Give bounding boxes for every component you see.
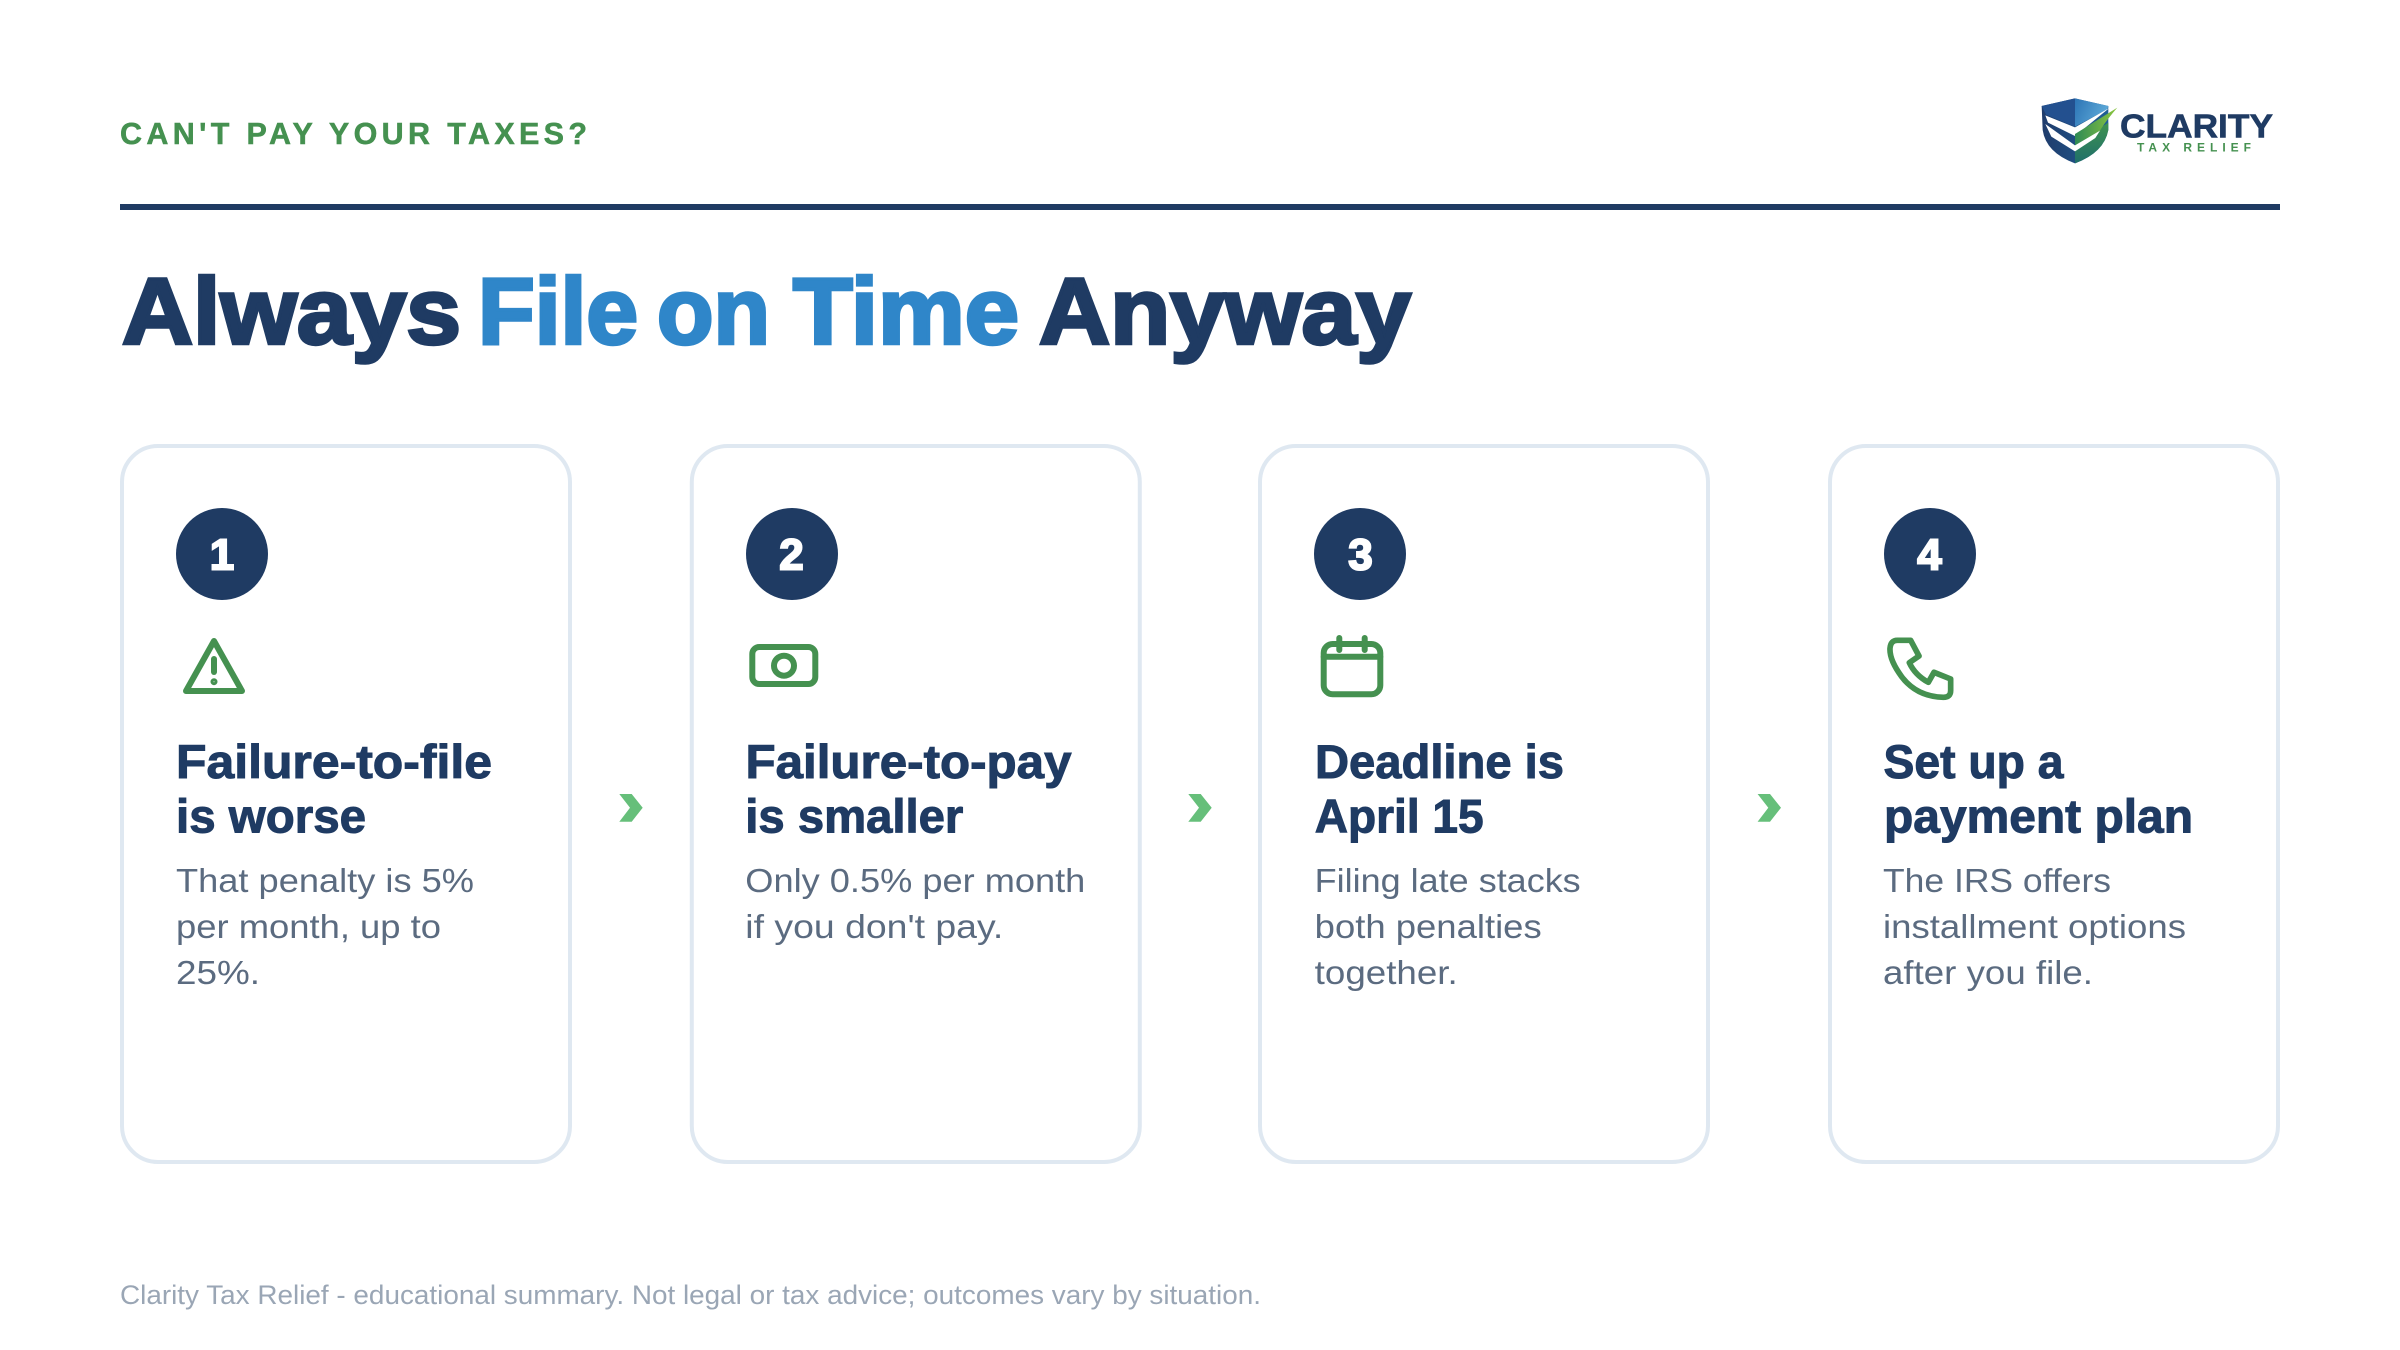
step 4 body: The IRS offers [1883,863,2111,900]
step 3 heading [1315,735,1564,842]
step number 2 [746,508,838,600]
step 2 body [745,863,1085,946]
step number 3 [1314,508,1406,600]
step 3 body: both penalties [1315,909,1542,946]
arrow 2 [1188,794,1212,822]
step 3 body: Filing late stacks [1315,863,1581,900]
icon: banknote [752,647,815,684]
step number 1: 1 [210,530,234,580]
step number 4 [1884,508,1976,600]
icon: warning triangle [186,641,242,691]
step 1 body: per month, up to [176,909,441,946]
step 1 body [176,863,474,992]
panel: step 1 failure-to-file [122,446,570,1162]
panel: step 4 payment plan [1830,446,2278,1162]
step 4 body: after you file. [1883,955,2093,992]
step 2 heading: is smaller [745,790,963,842]
logo: Clarity Tax Relief [2042,98,2273,163]
arrow 3 [1758,794,1781,822]
step 2 body: if you don't pay. [745,909,1003,946]
step 4 heading [1884,735,2193,842]
step 3 body: together. [1315,955,1458,992]
step 4 heading: Set up a [1884,735,2064,788]
footer disclaimer: Clarity Tax Relief - educational summary. Not legal or tax advice; outcomes vary by situation. [120,1280,1261,1310]
step 1 heading [176,735,492,842]
step 1 body: 25%. [176,955,260,992]
title: on [657,258,770,364]
kicker heading: CAN'T PAY YOUR TAXES? [120,117,587,151]
icon: phone [1890,640,1951,697]
title: File [478,258,638,364]
icon: calendar [1324,638,1380,694]
step 2 heading: Failure-to-pay [746,735,1072,788]
step 1 heading: is worse [176,790,366,842]
panel: step 2 failure-to-pay [692,446,1140,1162]
logo wordmark: CLARITY [2120,108,2273,144]
arrow 1 [619,794,643,822]
step number 4: 4 [1917,530,1942,580]
step 3 body [1315,863,1581,992]
step number 1 [176,508,268,600]
step number 3: 3 [1348,530,1373,580]
title [122,258,1411,364]
title: Anyway [1039,258,1411,364]
step 3 heading: Deadline is [1315,735,1564,788]
step number 2: 2 [779,530,804,580]
step 2 body: Only 0.5% per month [745,863,1085,900]
step 2 heading [745,735,1072,842]
step 3 heading: April 15 [1315,790,1484,842]
panel: step 3 deadline [1260,446,1708,1162]
step 4 body [1883,863,2186,992]
step 1 heading: Failure-to-file [176,735,492,788]
title: Time [793,258,1019,364]
step 4 body: installment options [1883,909,2186,946]
header rule [120,204,2280,210]
logo tagline: TAX RELIEF [2137,141,2251,155]
logo shield [2042,98,2117,163]
step 1 body: That penalty is 5% [176,863,474,900]
title: Always [122,258,461,364]
step 4 heading: payment plan [1884,790,2193,842]
